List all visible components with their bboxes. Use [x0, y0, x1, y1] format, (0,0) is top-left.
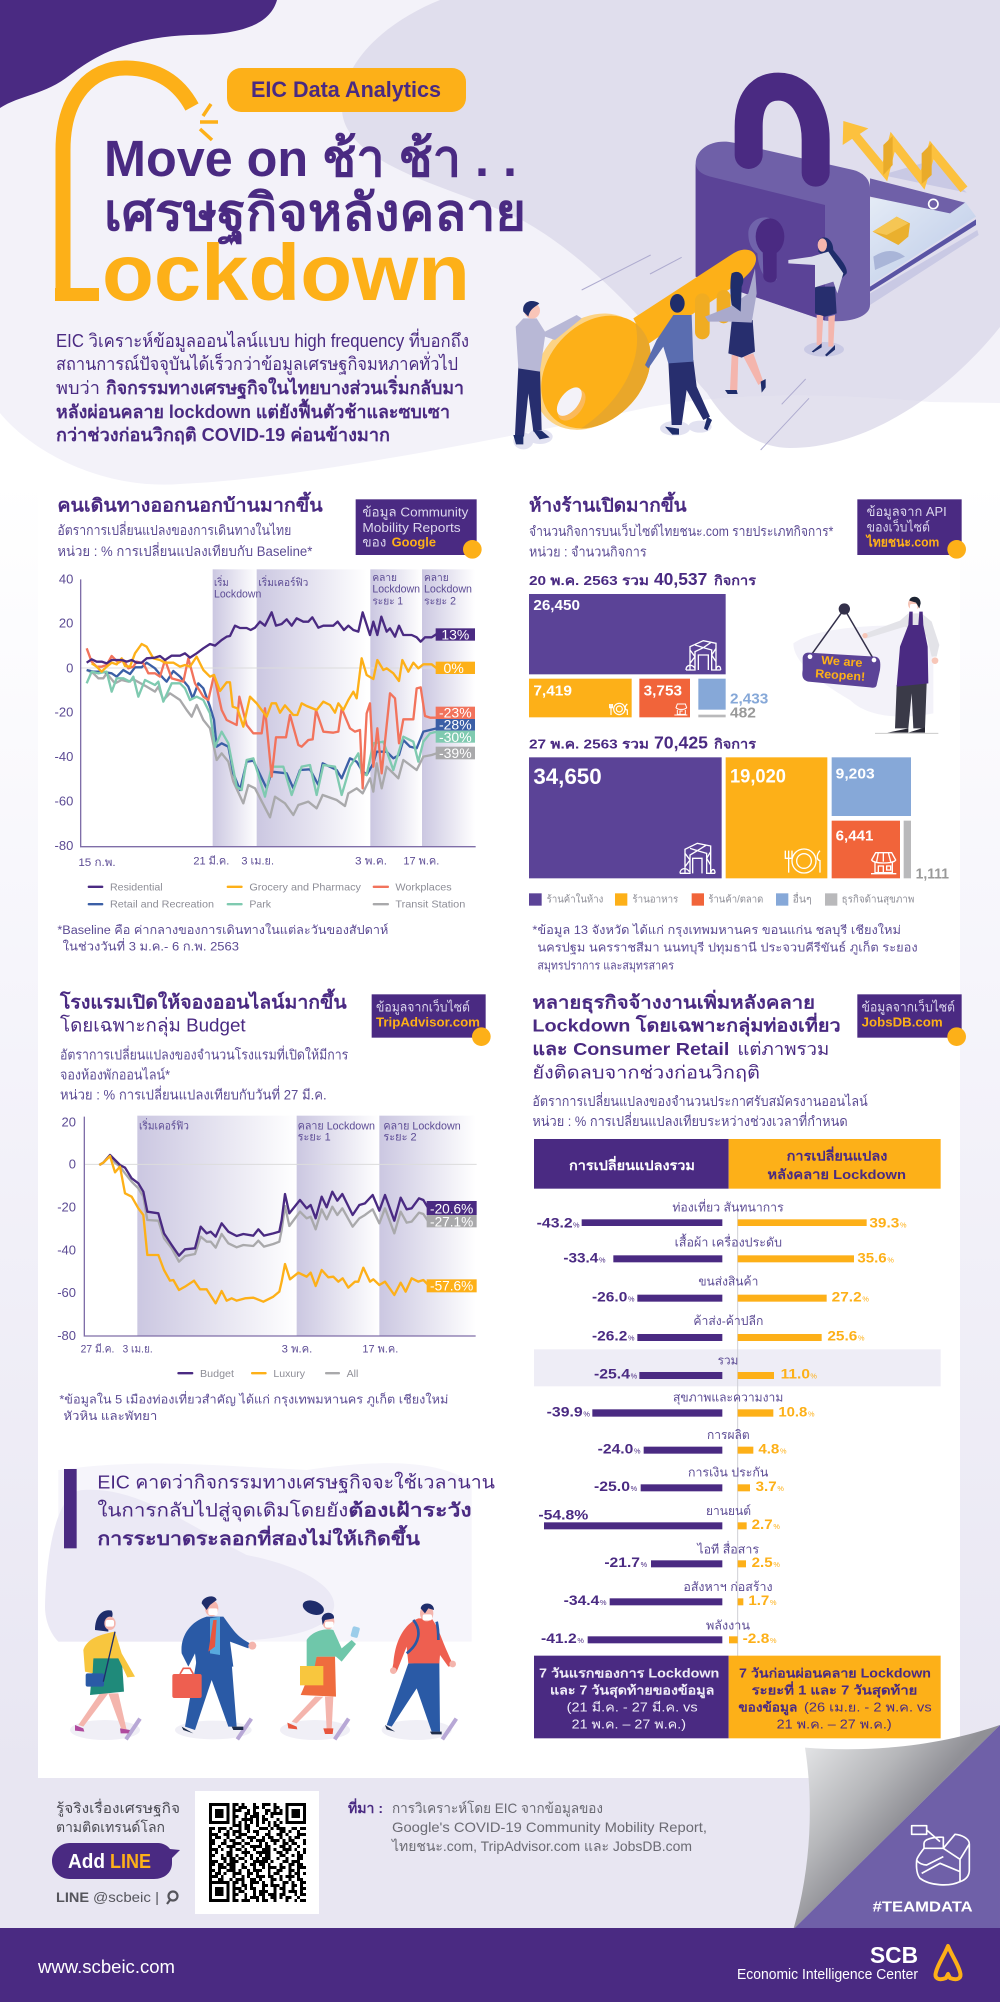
chart legend: Residential [110, 882, 163, 893]
end labels: -57.6% [430, 1279, 473, 1294]
chart legend: All [347, 1369, 358, 1380]
subtitle: อัตราการเปลี่ยนแปลงของจำนวนโรงแรมที่เปิดให้มีการ [60, 1045, 348, 1062]
button: Add LINE: LINE [110, 1851, 151, 1873]
block: add LINE promo: @scbeic | [93, 1889, 159, 1905]
line chart: mobility: เริ่ม [214, 575, 229, 589]
table footer: right period definition: (26 เม.ย. - 2 พ.ค. vs [804, 1701, 932, 1715]
block: add LINE promo [52, 1799, 180, 1905]
row: tourism: % [573, 1220, 580, 1229]
heading: หลายธุรกิจจ้างงานเพิ่มหลังคลาย [532, 989, 815, 1014]
row: IT telecom [604, 1540, 780, 1570]
intro paragraph: หลังผ่อนคลาย lockdown แต่ยังฟื้นตัวช้าและซบเซา [56, 398, 450, 422]
treemap heading 20 May: กิจการ [714, 573, 757, 588]
intro paragraph: EIC วิเคราะห์ข้อมูลออนไลน์แบบ high frequency ที่บอกถึง [56, 328, 469, 352]
heading: คนเดินทางออกนอกบ้านมากขึ้น [57, 492, 323, 516]
footnote: สมุทรปราการ และสมุทรสาคร [537, 958, 674, 973]
row: health and beauty: % [583, 1410, 590, 1419]
title: เศรษฐกิจหลังคลาย [104, 184, 526, 246]
title [102, 130, 526, 317]
line chart: hotels: คลาย Lockdown [298, 1120, 375, 1132]
source note: ไทยชนะ.com, TripAdvisor.com และ JobsDB.com [391, 1838, 692, 1854]
button: Add LINE [52, 1843, 180, 1879]
row: health and beauty: สุขภาพและความงาม [673, 1391, 783, 1406]
row: logistics: 27.2 [832, 1288, 862, 1304]
intro paragraph: พบว่า [56, 378, 100, 398]
illustration: shopkeeper hanging reopen sign [793, 597, 939, 733]
line chart: hotels: 20 [62, 1115, 76, 1130]
source tag: Google: Mobility Reports [362, 520, 461, 535]
treemap heading 20 May: 20 พ.ค. 2563 รวม [529, 573, 649, 588]
source tag: JobsDB: JobsDB.com [862, 1015, 943, 1030]
row: finance insurance [594, 1466, 784, 1494]
row: finance insurance: การเงิน ประกัน [688, 1466, 769, 1480]
table footer: left period definition: 7 วันแรกของการ Lockdown [539, 1666, 719, 1680]
treemap 27 May [529, 757, 949, 882]
row: health and beauty: % [808, 1410, 815, 1419]
line chart: mobility: 17 พ.ค. [403, 855, 439, 867]
row: automotive [538, 1504, 780, 1532]
line chart: hotels: ระยะ 1 [298, 1132, 331, 1144]
callout text [97, 1471, 495, 1549]
panel: shops reopening (treemaps) [529, 492, 966, 973]
source tag: thaichana: ของเว็บไซต์ [867, 518, 930, 535]
row: logistics: -26.0 [592, 1288, 628, 1304]
line chart: mobility: 3 เม.ย. [241, 855, 274, 867]
footnote: *ข้อมูลใน 5 เมืองท่องเที่ยวสำคัญ ได้แก่ กรุงเทพมหานคร ภูเก็ต เชียงใหม่ [59, 1390, 448, 1407]
row: health and beauty [547, 1391, 815, 1420]
footnote: หัวหิน และพัทยา [63, 1409, 157, 1423]
table footer: right period definition: 7 วันก่อนผ่อนคลาย Lockdown [739, 1666, 931, 1680]
intro paragraph [56, 328, 469, 445]
intro paragraph: กว่าช่วงก่อนวิกฤติ COVID-19 ค่อนข้างมาก [56, 425, 390, 445]
treemap heading 27 May: 27 พ.ค. 2563 รวม [529, 736, 649, 751]
chart legend: Grocery and Pharmacy [249, 882, 362, 893]
source tag: TripAdvisor [372, 994, 491, 1046]
panel: employment by sector [532, 989, 966, 1738]
end labels: -23% [439, 704, 472, 720]
icon: plate and cutlery large [785, 849, 820, 873]
end labels: -27.1% [430, 1214, 473, 1229]
line chart: mobility: 40 [59, 571, 73, 586]
treemap 20 May: 7,419 [533, 683, 572, 699]
treemap heading 27 May [529, 732, 757, 752]
source tag: TripAdvisor: TripAdvisor.com [376, 1015, 480, 1030]
treemap heading 20 May [529, 569, 757, 589]
row: property construction: -34.4 [564, 1592, 600, 1608]
treemap 20 May: 482 [730, 705, 756, 721]
row: total: % [810, 1372, 817, 1381]
line chart: mobility: -20 [55, 705, 73, 720]
row: energy: % [577, 1636, 584, 1645]
accent bar [64, 1469, 77, 1548]
table footer: right period definition: 21 พ.ค. – 27 พ.ค.) [777, 1717, 892, 1731]
row: energy: -2.8 [743, 1630, 770, 1646]
chart legend: Park [249, 900, 272, 911]
SCB brand: Economic Intelligence Center [737, 1966, 918, 1983]
row: IT telecom: ไอที สื่อสาร [696, 1540, 759, 1556]
row: finance insurance: 3.7 [756, 1478, 777, 1494]
icon: padlock [696, 87, 870, 321]
footer bar [0, 1928, 1000, 2002]
line chart: mobility: ระยะ 2 [424, 595, 456, 607]
row: wholesale retail: ค้าส่ง-ค้าปลีก [693, 1314, 763, 1328]
line chart: hotels: -60 [57, 1285, 76, 1300]
intro paragraph: สถานการณ์ปัจจุบันได้เร็วกว่าข้อมูลเศรษฐกิจมหภาคทั่วไป [56, 351, 458, 375]
intro paragraph: กิจกรรมทางเศรษฐกิจในไทยบางส่วนเริ่มกลับมา [106, 375, 464, 400]
treemap 20 May: 26,450 [533, 598, 580, 614]
line chart: hotels: 0 [69, 1157, 76, 1172]
table footer: left period definition: 21 พ.ค. – 27 พ.ค.) [572, 1717, 686, 1731]
subtitle: หน่วย : % การเปลี่ยนแปลงเทียบกับ Baseline* [57, 542, 313, 559]
row: property construction: อสังหาฯ ก่อสร้าง [683, 1580, 773, 1594]
chart legend: Retail and Recreation [110, 900, 214, 911]
source tag: Google: ข้อมูล Community [362, 505, 469, 521]
subtitle [57, 521, 313, 559]
subtitle: อัตราการเปลี่ยนแปลงของการเดินทางในไทย [57, 521, 291, 538]
row: tourism [537, 1199, 907, 1230]
treemap 27 May: 6,441 [836, 829, 873, 845]
row: logistics: % [628, 1294, 635, 1303]
row: energy [541, 1618, 777, 1646]
row: manufacturing: % [634, 1446, 641, 1455]
treemap 20 May: 2,433 [730, 691, 768, 707]
row: logistics: % [862, 1294, 869, 1303]
treemap 27 May: 9,203 [836, 766, 875, 782]
heading [59, 988, 347, 1038]
person: man in red sweater [385, 1604, 456, 1734]
source tag: JobsDB: ข้อมูลจากเว็บไซต์ [862, 998, 955, 1016]
chart legend: Transit Station [395, 900, 466, 911]
chart legend [177, 1369, 358, 1380]
QR code [195, 1791, 319, 1914]
illustration: padlock, key and people [511, 87, 979, 453]
row: IT telecom: % [641, 1560, 648, 1569]
row: logistics [592, 1275, 869, 1304]
person: woman in green top [287, 1598, 360, 1734]
footnote: นครปฐม นครราชสีมา นนทบุรี ปทุมธานี ประจวบคีรีขันธ์ ภูเก็ต ระยอง [537, 940, 918, 956]
icon: magnifier [167, 1892, 178, 1904]
row: finance insurance: % [777, 1484, 784, 1493]
subtitle: หน่วย : % การเปลี่ยนแปลงเทียบกับวันที่ 27 มี.ค. [60, 1085, 327, 1102]
icon: plate and cutlery [610, 703, 627, 715]
chart legend: Budget [200, 1369, 234, 1380]
website: www.scbeic.com [37, 1957, 175, 1977]
line chart: mobility: คลาย [424, 572, 449, 584]
heading: และ Consumer Retail [532, 1039, 729, 1059]
yellow lock-shaped L outline [55, 68, 218, 301]
table footer: left period definition: และ 7 วันสุดท้ายของข้อมูล [550, 1683, 714, 1698]
row: total: 11.0 [781, 1366, 810, 1382]
person: man holding key bow [513, 301, 582, 449]
row: property construction [564, 1580, 777, 1608]
icon: mall [686, 641, 721, 670]
row: wholesale retail: % [858, 1334, 865, 1343]
sign text [815, 653, 866, 684]
treemap legend: ร้านอาหาร [632, 894, 679, 906]
panel: hotels opening online booking [57, 988, 491, 1423]
line chart: hotels: 3 พ.ค. [282, 1344, 312, 1356]
chart legend: Luxury [273, 1369, 306, 1380]
line chart: mobility: 21 มี.ค. [193, 854, 229, 867]
row: energy: พลังงาน [706, 1618, 751, 1632]
chart legend: Workplaces [395, 882, 452, 893]
line chart: mobility: -40 [55, 749, 73, 764]
header purple corner blob [0, 0, 277, 108]
line chart: hotels: ระยะ 2 [383, 1132, 417, 1144]
icon: pie chart cylinder [912, 1826, 969, 1885]
heading: ห้างร้านเปิดมากขึ้น [529, 492, 687, 516]
table header: การเปลี่ยนแปลง [787, 1146, 887, 1164]
treemap heading 20 May: 40,537 [654, 569, 707, 589]
footnote: *Baseline คือ ค่ากลางของการเดินทางในแต่ละวันของสัปดาห์ [57, 923, 388, 937]
end labels: 13% [441, 626, 469, 642]
row: automotive: ยานยนต์ [706, 1504, 751, 1518]
label: #TEAMDATA [873, 1899, 973, 1915]
end labels [436, 626, 475, 761]
footnote [532, 923, 918, 973]
callout text: ต้องเฝ้าระวัง [348, 1500, 472, 1521]
source tag: thaichana [857, 499, 966, 559]
table header: หลังคลาย Lockdown [767, 1167, 906, 1182]
row: automotive: -54.8% [538, 1506, 589, 1522]
row: IT telecom: 2.5 [752, 1554, 773, 1570]
source tag: TripAdvisor: ข้อมูลจากเว็บไซต์ [376, 998, 470, 1016]
person: man in blue suit [172, 1596, 256, 1733]
line chart: hotels: 3 เม.ย. [123, 1344, 153, 1356]
badge: EIC Data Analytics: EIC Data Analytics [251, 77, 441, 102]
source tag: Google [356, 499, 482, 559]
row: finance insurance: % [631, 1484, 638, 1493]
sign text: We are [821, 653, 863, 670]
row: tourism: 39.3 [869, 1214, 900, 1230]
row: energy: -41.2 [541, 1630, 577, 1646]
person: man in blue sweater [645, 294, 712, 436]
line chart: mobility: 0 [66, 660, 73, 675]
row: manufacturing: % [780, 1446, 787, 1455]
treemap legend [529, 892, 914, 906]
line chart: hotels: -20 [57, 1200, 76, 1215]
row: apparel [563, 1234, 894, 1265]
line chart: mobility: เริ่มเคอร์ฟิว [258, 575, 308, 589]
button: Add LINE: Add [68, 1851, 105, 1873]
row: IT telecom: -21.7 [604, 1554, 640, 1570]
footnote [57, 923, 388, 954]
row: property construction: % [770, 1598, 777, 1607]
row: manufacturing: 4.8 [758, 1440, 780, 1456]
person: woman in skirt pushing key [705, 268, 766, 394]
subtitle: จองห้องพักออนไลน์* [60, 1066, 171, 1082]
row: apparel: % [887, 1255, 894, 1264]
subtitle [532, 1092, 868, 1129]
footnote [59, 1390, 448, 1423]
block: add LINE promo: รู้จริงเรื่องเศรษฐกิจ [56, 1799, 180, 1817]
treemap 20 May [529, 594, 768, 721]
source note [348, 1798, 707, 1854]
row: apparel: % [599, 1255, 606, 1264]
row: wholesale retail: -26.2 [592, 1328, 628, 1344]
block: add LINE promo: ตามติดเทรนด์โลก [56, 1819, 165, 1835]
title: ockdown [102, 228, 470, 317]
line chart: hotels: เริ่มเคอร์ฟิว [139, 1117, 189, 1132]
heading: โรงแรมเปิดให้จองออนไลน์มากขึ้น [59, 988, 347, 1012]
source tag: Google: Google [392, 535, 436, 550]
row: tourism: ท่องเที่ยว สันทนาการ [672, 1199, 784, 1215]
row: property construction: % [600, 1598, 607, 1607]
lower rows [534, 1354, 941, 1738]
block: add LINE promo: LINE [56, 1889, 89, 1905]
row: manufacturing: -24.0 [598, 1440, 634, 1456]
row: finance insurance: -25.0 [594, 1478, 630, 1494]
line chart: mobility: Lockdown [424, 584, 472, 596]
end labels [427, 1201, 477, 1294]
sign text: Reopen! [815, 666, 866, 684]
icon: golden key [511, 250, 756, 453]
row: wholesale retail: 25.6 [827, 1328, 858, 1344]
icon: website card behind lock [870, 178, 979, 305]
table footer: left period definition: (21 มี.ค. - 27 มี.ค. vs [567, 1701, 698, 1715]
treemap 27 May: 19,020 [730, 766, 786, 787]
line chart: hotels [57, 1115, 477, 1356]
treemap legend: ธุรกิจด้านสุขภาพ [842, 894, 914, 906]
heading: ยังติดลบจากช่วงก่อนวิกฤติ [532, 1062, 760, 1082]
title: Move on ช้า ช้า . . [104, 130, 517, 187]
row: property construction: 1.7 [748, 1592, 770, 1608]
treemap 27 May: 1,111 [916, 866, 949, 882]
row: apparel: 35.6 [857, 1249, 887, 1265]
row: tourism: -43.2 [537, 1214, 573, 1230]
treemap legend: อื่นๆ [793, 892, 812, 906]
icon: mall large [680, 843, 715, 873]
row: wholesale retail: % [628, 1334, 635, 1343]
line chart: mobility: 15 ก.พ. [78, 857, 116, 869]
highlight row background [534, 1349, 941, 1386]
SCB brand: SCB [870, 1942, 918, 1968]
heading: แต่ภาพรวม [737, 1039, 829, 1059]
row: manufacturing: การผลิต [707, 1428, 750, 1442]
subtitle: หน่วย : % การเปลี่ยนแปลงเทียบระหว่างช่วงเวลาที่กำหนด [532, 1112, 848, 1129]
person: woman beside lock [788, 237, 847, 357]
heading: โดยเฉพาะกลุ่ม Budget [60, 1015, 246, 1038]
line chart: mobility [55, 569, 476, 869]
row: total: รวม [718, 1354, 738, 1368]
row: apparel: -33.4 [563, 1249, 599, 1265]
row: logistics: ขนส่งสินค้า [698, 1275, 758, 1289]
treemap legend: ร้านค้าในห้าง [547, 894, 603, 906]
chart legend [88, 882, 466, 911]
icon: shop [674, 704, 687, 715]
line chart: mobility: 3 พ.ค. [355, 855, 387, 867]
subtitle [60, 1045, 348, 1102]
line chart: hotels: 17 พ.ค. [362, 1344, 398, 1356]
line chart: mobility: Lockdown [214, 588, 261, 600]
line chart: hotels: -80 [57, 1328, 76, 1343]
row: health and beauty: 10.8 [778, 1404, 808, 1420]
end labels: -20.6% [430, 1201, 473, 1216]
source tag: Google: ของ [362, 535, 386, 550]
badge: EIC Data Analytics [227, 68, 466, 112]
icon: shop large [871, 853, 896, 874]
subtitle: หน่วย : จำนวนกิจการ [529, 545, 647, 560]
SCB brand [737, 1942, 918, 1983]
treemap legend: ร้านค้า/ตลาด [708, 894, 763, 906]
subtitle [529, 522, 834, 560]
source tag: thaichana: ข้อมูลจาก API [867, 504, 947, 520]
line chart: mobility: คลาย [372, 572, 397, 584]
end labels: -30% [439, 729, 472, 745]
treemap heading 27 May: กิจการ [714, 736, 757, 751]
table footer: right period definition [729, 1656, 941, 1738]
row: automotive: 2.7 [752, 1516, 773, 1532]
icon: SCB bell logo [935, 1946, 961, 1979]
line chart: mobility: 20 [59, 616, 73, 631]
table header [534, 1139, 941, 1189]
row: total: % [631, 1372, 638, 1381]
person: woman in yellow top [75, 1610, 135, 1733]
subtitle: อัตราการเปลี่ยนแปลงของจำนวนประกาศรับสมัครงานออนไลน์ [532, 1092, 868, 1109]
source note: ที่มา : [348, 1798, 383, 1816]
row: health and beauty: -39.9 [547, 1404, 583, 1420]
heading: Lockdown โดยเฉพาะกลุ่มท่องเที่ยว [532, 1013, 841, 1038]
footnote: ในช่วงวันที่ 3 ม.ค.- 6 ก.พ. 2563 [63, 938, 239, 954]
table footer: right period definition: ระยะที่ 1 และ 7 วันสุดท้าย [752, 1680, 917, 1698]
panel: people going out (mobility) [55, 492, 482, 954]
source tag: JobsDB [857, 994, 966, 1046]
line chart: mobility: -80 [55, 838, 73, 853]
row: wholesale retail [592, 1314, 865, 1344]
row: energy: % [770, 1636, 777, 1645]
row: automotive: % [773, 1522, 780, 1531]
line chart: mobility: Lockdown [372, 584, 420, 596]
callout text: EIC คาดว่ากิจกรรมทางเศรษฐกิจจะใช้เวลานาน [97, 1471, 495, 1493]
row: tourism: % [900, 1220, 907, 1229]
source note: Google's COVID-19 Community Mobility Report, [392, 1819, 707, 1835]
line chart: mobility: ระยะ 1 [372, 595, 403, 607]
row: apparel: เสื้อผ้า เครื่องประดับ [675, 1234, 782, 1250]
line chart: mobility: -60 [55, 794, 73, 809]
row: IT telecom: % [773, 1560, 780, 1569]
treemap 20 May: 3,753 [644, 683, 682, 699]
heading [532, 989, 841, 1082]
callout text: ในการกลับไปสู่จุดเดิมโดยยัง [97, 1500, 348, 1523]
row: total [594, 1354, 817, 1382]
table footer: left period definition [534, 1656, 729, 1738]
line chart: hotels: -40 [57, 1242, 76, 1257]
end labels: -28% [439, 717, 472, 733]
subtitle: จำนวนกิจการบนเว็บไซต์ไทยชนะ.com รายประเภทกิจการ* [529, 522, 834, 539]
row: manufacturing [598, 1428, 787, 1456]
source tag: thaichana: ไทยชนะ.com [865, 534, 939, 550]
table footer: right period definition: ของข้อมูล [738, 1701, 797, 1716]
person: shopkeeper [862, 597, 939, 733]
row: total: -25.4 [594, 1366, 630, 1382]
end labels: -39% [439, 745, 472, 761]
icon: rising zigzag arrow [843, 121, 967, 193]
table header: การเปลี่ยนแปลงรวม [569, 1155, 695, 1173]
line chart: hotels: 27 มี.ค. [81, 1343, 114, 1356]
callout text: การระบาดระลอกที่สองไม่ให้เกิดขึ้น [97, 1525, 420, 1549]
footnote: *ข้อมูล 13 จังหวัด ได้แก่ กรุงเทพมหานคร ขอนแก่น ชลบุรี เชียงใหม่ [532, 923, 901, 938]
page curl corner with team data [793, 1725, 1000, 1929]
end labels: 0% [444, 660, 464, 676]
source note: การวิเคราะห์โดย EIC จากข้อมูลของ [392, 1800, 603, 1817]
treemap 27 May: 34,650 [533, 764, 602, 789]
line chart: hotels: คลาย Lockdown [383, 1120, 461, 1132]
treemap heading 27 May: 70,425 [654, 732, 708, 752]
panel: EIC outlook callout with walkers [45, 1463, 495, 1740]
